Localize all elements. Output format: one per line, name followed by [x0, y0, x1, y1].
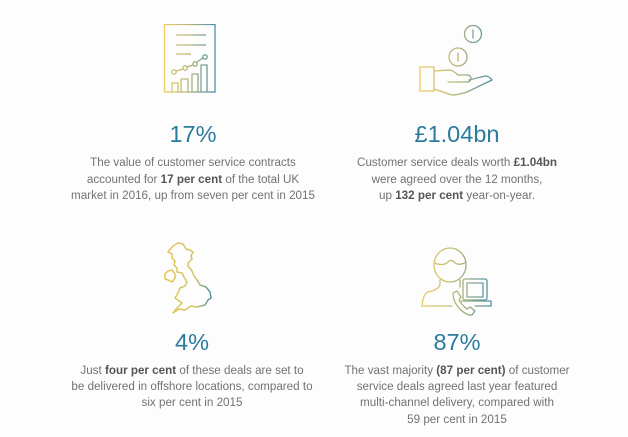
heading: 4%: 4%: [175, 329, 209, 355]
text: description line 3: up 132 per cent year-on-year.: [379, 189, 535, 202]
heading: 87%: 87%: [433, 329, 481, 355]
heading: 17%: 17%: [169, 121, 217, 147]
text: description line 3: market in 2016, up from seven per cent in 2015: [71, 189, 315, 202]
panel: 87 percent: [344, 247, 570, 426]
text: description: The vast majority (87 per cent) of customer: [344, 364, 570, 377]
icon: agent with laptop: [421, 247, 492, 316]
text: description: Just four per cent of these deals are set to: [80, 364, 304, 377]
panel: 1.04bn: [357, 24, 557, 202]
icon: report with chart: [164, 24, 216, 93]
icon: hand with coins: [419, 24, 493, 96]
text: description line 3: six per cent in 2015: [142, 396, 242, 409]
panel: 4 percent: [71, 242, 313, 409]
text: description line 4: 59 per cent in 2015: [407, 413, 507, 426]
heading: £1.04bn: £1.04bn: [415, 121, 499, 147]
text: description: Customer service deals worth £1.04bn: [357, 156, 557, 169]
panel: 17 percent: [71, 24, 315, 202]
text: description line 2: service deals agreed last year featured: [357, 380, 557, 393]
text: description: The value of customer service contracts: [90, 156, 296, 169]
text: description line 2: accounted for 17 per cent of the total UK: [87, 173, 299, 186]
text: description line 3: multi-channel delivery, compared with: [360, 396, 554, 409]
icon: UK map: [164, 242, 212, 314]
text: description line 2: were agreed over the 12 months,: [372, 173, 542, 186]
text: description line 2: be delivered in offshore locations, compared to: [71, 380, 313, 393]
